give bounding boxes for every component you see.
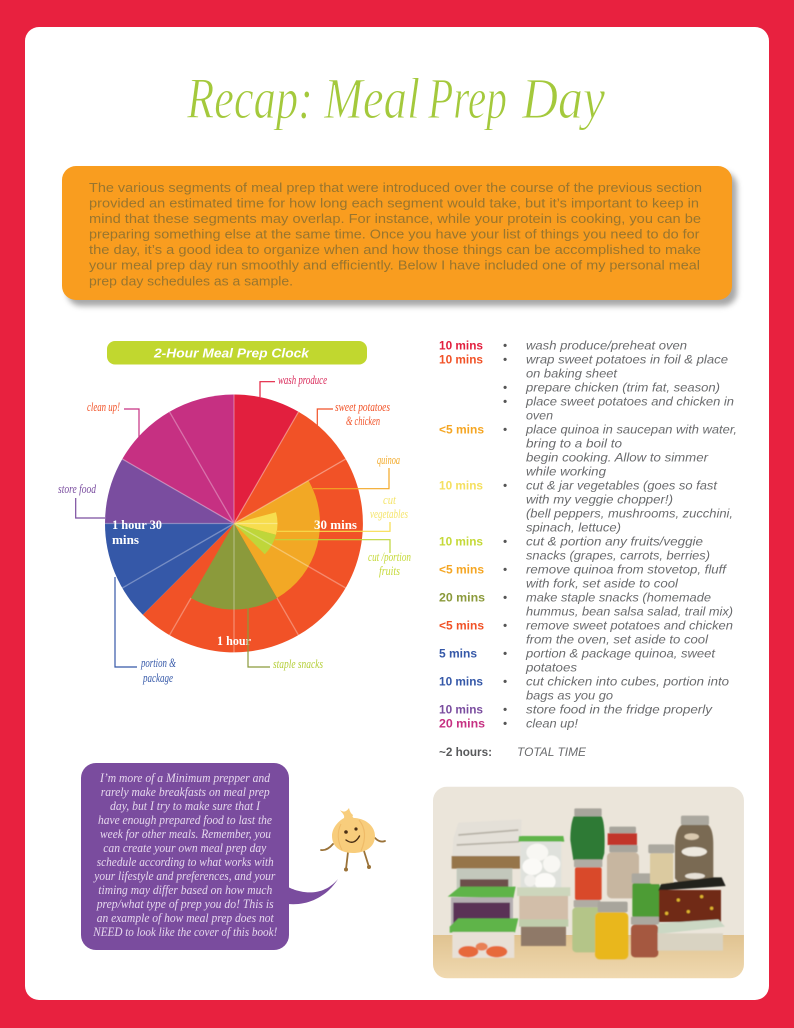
panel: intro text: mind that these segments may overlap. For instance, while your protein is cooking, you can be	[89, 211, 701, 226]
panel: intro text: the day, it’s a good idea to organize when and how those things can be accomplished to make	[89, 242, 701, 257]
icon: onion mascot	[321, 808, 385, 872]
schedule: bullets: •	[503, 534, 507, 548]
schedule: task list	[517, 338, 737, 759]
callout: cut/portion fruits	[275, 540, 411, 578]
panel: speech bubble: timing may differ based on how much	[98, 883, 272, 897]
callout: wash produce: wash produce	[278, 372, 327, 387]
schedule: durations: 5 mins	[439, 646, 477, 660]
schedule: task list: spinach, lettuce)	[526, 520, 621, 534]
clock heading: 2-Hour Meal Prep Clock	[153, 346, 310, 360]
black lid tub	[658, 877, 726, 891]
schedule: bullets: •	[503, 646, 507, 660]
title: Recap:	[186, 66, 313, 131]
schedule: durations: ~2 hours:	[439, 745, 492, 759]
egg box	[518, 836, 564, 842]
schedule: task list: potatoes	[525, 660, 577, 674]
callout: cut vegetables	[277, 492, 408, 531]
panel: speech bubble: rarely make breakfasts on meal prep	[101, 785, 270, 799]
schedule: task list: portion & package quinoa, sweet	[525, 646, 716, 660]
schedule: task list: from the oven, set aside to cool	[526, 632, 709, 646]
schedule: task list: while working	[526, 464, 606, 478]
callout: wash produce	[260, 372, 327, 397]
schedule: durations	[439, 338, 492, 759]
callout: staple snacks	[248, 608, 323, 671]
schedule: bullets: •	[503, 702, 507, 716]
schedule: task list: clean up!	[526, 716, 579, 730]
pie chart: meal prep clock: mins	[112, 532, 139, 547]
panel: speech bubble: week for other meals. Remember, you	[100, 827, 271, 841]
panel: intro text: prep day schedules as a sample.	[89, 274, 293, 288]
schedule: bullets: •	[503, 590, 507, 604]
schedule: task list: bring to a boil to	[526, 436, 622, 450]
panel: speech bubble: an example of how meal prep does not	[97, 911, 274, 925]
clock heading	[107, 341, 367, 364]
pie chart: meal prep clock: 30 mins	[314, 517, 357, 532]
schedule: durations: 20 mins	[439, 716, 485, 730]
bags	[452, 836, 522, 858]
schedule: durations: 10 mins	[439, 674, 483, 688]
schedule: task list: hummus, bean salsa salad, trail mix)	[526, 604, 733, 618]
callout: cut/portion fruits: fruits	[379, 563, 400, 578]
callout: sweet potatoes and chicken: & chicken	[346, 413, 380, 428]
schedule: task list: TOTAL TIME	[517, 745, 587, 759]
callout: store food	[58, 481, 105, 518]
photo: meal prep containers	[433, 787, 744, 978]
schedule: bullets: •	[503, 394, 507, 408]
schedule: durations: 10 mins	[439, 702, 483, 716]
panel: speech bubble: day, but I try to make sure that I	[110, 799, 261, 813]
panel: speech bubble: NEED to look like the cover of this book!	[92, 925, 277, 939]
schedule: durations: 10 mins	[439, 352, 483, 366]
schedule: task list: prepare chicken (trim fat, season)	[525, 380, 720, 394]
schedule: durations: <5 mins	[439, 562, 484, 576]
callout: quinoa: quinoa	[377, 452, 400, 467]
schedule: durations: 10 mins	[439, 534, 483, 548]
callout: clean up	[87, 399, 139, 437]
panel: intro text	[62, 166, 737, 306]
callout: clean up: clean up!	[87, 399, 120, 414]
panel: intro text: provided an estimated time for how long each segment would take, but it’s important to keep in	[89, 196, 699, 210]
panel: speech bubble	[81, 763, 338, 950]
panel: intro text: preparing something else at the same time. Once you have your list of things you need to do for	[89, 226, 700, 242]
schedule: task list: store food in the fridge properly	[526, 702, 713, 716]
pie chart: meal prep clock	[105, 394, 363, 652]
schedule: durations: <5 mins	[439, 422, 484, 436]
callout: quinoa	[313, 452, 400, 489]
schedule: bullets: •	[503, 562, 507, 576]
callout: store food: store food	[58, 481, 96, 496]
panel: speech bubble: I’m more of a Minimum prepper and	[99, 771, 271, 785]
schedule: task list: cut & jar vegetables (goes so fast	[526, 478, 718, 492]
schedule: bullets: •	[503, 338, 507, 352]
panel: speech bubble: your lifestyle and preferences, and your	[92, 869, 275, 883]
schedule: task list: wash produce/preheat oven	[526, 338, 687, 352]
pie chart: meal prep clock: 1 hour 30	[112, 517, 162, 532]
schedule: durations: <5 mins	[439, 618, 484, 632]
schedule: task list: place quinoa in saucepan with water,	[525, 422, 737, 436]
title: Prep	[427, 66, 507, 131]
callout: cut vegetables: vegetables	[370, 506, 408, 521]
schedule: task list: place sweet potatoes and chicken in	[525, 394, 734, 408]
schedule: durations: 20 mins	[439, 590, 485, 604]
schedule: task list: snacks (grapes, carrots, berries)	[526, 548, 710, 562]
schedule: task list: wrap sweet potatoes in foil & place	[526, 352, 728, 366]
schedule: task list: begin cooking. Allow to simmer	[526, 450, 709, 464]
jars	[574, 808, 602, 816]
callout: portion and package: portion &	[140, 655, 177, 670]
callout: sweet potatoes and chicken: sweet potatoes	[335, 399, 390, 414]
schedule: task list: make staple snacks (homemade	[526, 590, 711, 604]
schedule: task list: (bell peppers, mushrooms, zucchini,	[526, 506, 733, 520]
callout: cut/portion fruits: cut /portion	[368, 549, 411, 564]
schedule: task list: on baking sheet	[526, 366, 618, 380]
schedule: bullets: •	[503, 422, 507, 436]
schedule: bullets: •	[503, 352, 507, 366]
schedule: bullets	[503, 338, 507, 730]
schedule: bullets: •	[503, 478, 507, 492]
schedule: durations: 10 mins	[439, 478, 483, 492]
schedule: task list: with my veggie chopper!)	[526, 492, 673, 506]
title: Meal	[323, 66, 420, 131]
panel: speech bubble: can create your own meal prep day	[103, 841, 267, 855]
schedule: task list: oven	[526, 408, 553, 422]
schedule: task list: remove quinoa from stovetop, fluff	[526, 562, 728, 576]
panel: intro text: your meal prep day run smoothly and efficiently. Below I have included one of my personal meal	[89, 258, 700, 272]
schedule: bullets: •	[503, 674, 507, 688]
schedule: task list: cut & portion any fruits/veggie	[526, 534, 703, 548]
panel: speech bubble: schedule according to what works with	[97, 855, 274, 869]
schedule: bullets: •	[503, 618, 507, 632]
schedule: task list: with fork, set aside to cool	[526, 576, 679, 590]
pie chart: meal prep clock: 1 hour	[217, 633, 251, 648]
callout: cut vegetables: cut	[383, 492, 396, 507]
panel: speech bubble: have enough prepared food to last the	[98, 813, 272, 827]
callout: portion and package: package	[142, 670, 173, 685]
schedule: durations: 10 mins	[439, 338, 483, 352]
panel: speech bubble: prep/what type of prep you do! This is	[96, 897, 274, 911]
schedule: task list: cut chicken into cubes, portion into	[526, 674, 729, 688]
schedule: bullets: •	[503, 380, 507, 394]
panel: intro text: The various segments of meal prep that were introduced over the course of the previous section	[89, 180, 702, 195]
title	[186, 66, 605, 131]
title: Day	[521, 66, 605, 131]
schedule: task list: remove sweet potatoes and chicken	[526, 618, 733, 632]
callout: portion and package	[115, 577, 177, 685]
rice tub	[658, 919, 725, 934]
schedule: bullets: •	[503, 716, 507, 730]
callout: staple snacks: staple snacks	[273, 656, 323, 671]
schedule: task list: bags as you go	[526, 688, 613, 702]
callout: sweet potatoes and chicken	[317, 399, 390, 428]
